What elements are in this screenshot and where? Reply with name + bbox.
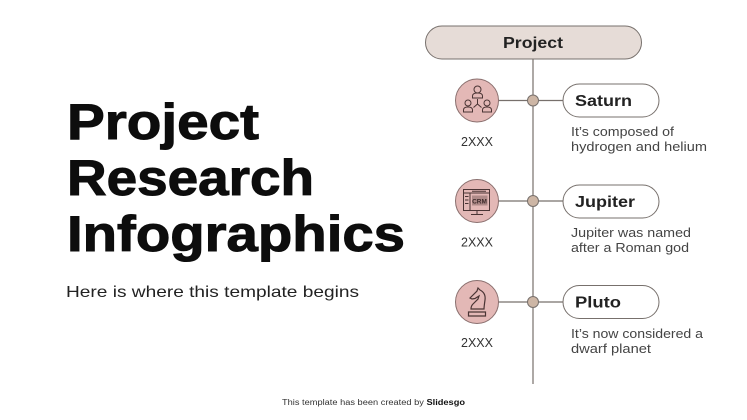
description: hydrogen and helium bbox=[571, 140, 707, 154]
row: Jupiter: Jupiter bbox=[575, 194, 635, 211]
description: It’s now considered a bbox=[571, 327, 703, 341]
description: dwarf planet bbox=[571, 342, 652, 356]
node bbox=[528, 296, 538, 308]
label pill bbox=[563, 185, 659, 218]
description bbox=[571, 327, 703, 356]
row: Pluto: Pluto bbox=[575, 294, 621, 312]
year label: 2XXX bbox=[461, 336, 494, 350]
node bbox=[528, 196, 538, 206]
timeline vertical line bbox=[532, 59, 534, 384]
row: Saturn bbox=[456, 79, 707, 154]
icon: CRM monitor bbox=[456, 180, 498, 222]
title: Research bbox=[67, 150, 314, 206]
icon: people network bbox=[456, 79, 498, 122]
description: Jupiter was named bbox=[571, 226, 691, 240]
row: Jupiter bbox=[456, 180, 691, 255]
header pill: Project: Project bbox=[503, 35, 564, 52]
year label: 2XXX bbox=[461, 236, 494, 250]
row: Pluto bbox=[456, 280, 703, 356]
row: Saturn: Saturn bbox=[575, 93, 632, 110]
label pill bbox=[563, 84, 659, 117]
node bbox=[528, 95, 538, 106]
year label: 2XXX bbox=[461, 135, 494, 149]
description: It’s composed of bbox=[571, 125, 675, 139]
icon: chess knight bbox=[456, 280, 498, 324]
header pill: Project bbox=[426, 26, 642, 59]
description bbox=[571, 125, 707, 154]
description: after a Roman god bbox=[571, 241, 689, 255]
subtitle: Here is where this template begins bbox=[66, 284, 359, 301]
icon: CRM monitor: CRM bbox=[472, 198, 487, 206]
footer credit: This template has been created by Slidesgo bbox=[282, 398, 465, 407]
title bbox=[67, 94, 405, 262]
description bbox=[571, 226, 691, 255]
title: Infographics bbox=[67, 206, 405, 262]
label pill bbox=[563, 286, 659, 318]
title: Project bbox=[67, 94, 259, 150]
